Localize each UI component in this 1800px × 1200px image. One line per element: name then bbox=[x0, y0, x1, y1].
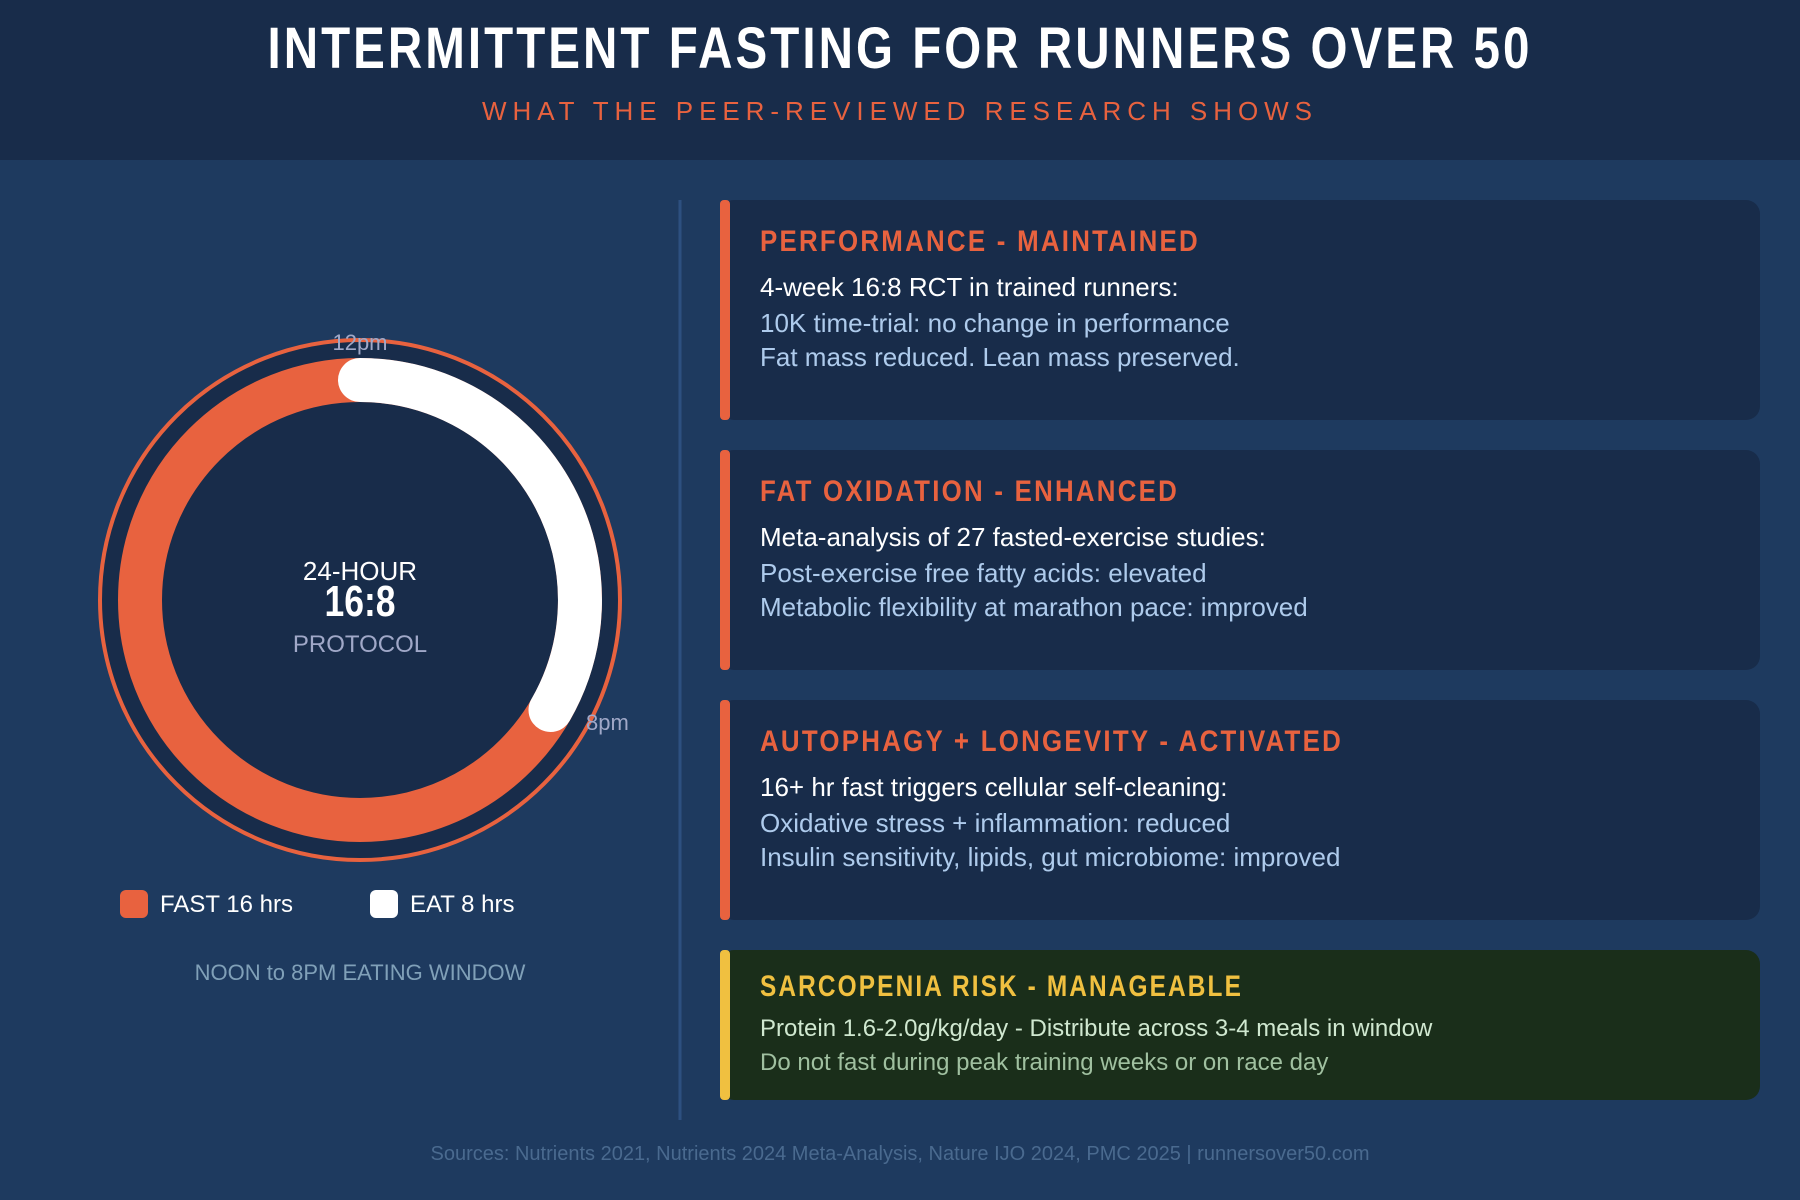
center label: PROTOCOL bbox=[293, 631, 427, 658]
text block bbox=[760, 522, 1308, 622]
panel: fat oxidation bbox=[720, 450, 1760, 670]
text block: Post-exercise free fatty acids: elevated bbox=[760, 558, 1207, 588]
panel: performance bbox=[720, 200, 1760, 420]
text block: Fat mass reduced. Lean mass preserved. bbox=[760, 342, 1240, 372]
heading: PERFORMANCE - MAINTAINED bbox=[760, 225, 1200, 258]
header band bbox=[0, 0, 1800, 160]
title: INTERMITTENT FASTING FOR RUNNERS OVER 50 bbox=[268, 16, 1532, 81]
panel: 24-hour clock bbox=[100, 330, 629, 985]
panel: autophagy bbox=[720, 700, 1760, 920]
text block: 4-week 16:8 RCT in trained runners: bbox=[760, 272, 1179, 302]
text block bbox=[760, 272, 1240, 372]
heading: AUTOPHAGY + LONGEVITY - ACTIVATED bbox=[760, 725, 1343, 758]
text block: Metabolic flexibility at marathon pace: improved bbox=[760, 592, 1308, 622]
text block: Do not fast during peak training weeks or on race day bbox=[760, 1049, 1328, 1076]
text block: 16+ hr fast triggers cellular self-cleaning: bbox=[760, 772, 1228, 802]
text block: Insulin sensitivity, lipids, gut microbiome: improved bbox=[760, 842, 1340, 872]
center label: 24-HOUR bbox=[303, 556, 417, 586]
subtitle: WHAT THE PEER-REVIEWED RESEARCH SHOWS bbox=[482, 96, 1318, 126]
center label bbox=[293, 556, 427, 658]
text block: Oxidative stress + inflammation: reduced bbox=[760, 808, 1230, 838]
panel: sarcopenia risk bbox=[720, 950, 1760, 1100]
text block: Meta-analysis of 27 fasted-exercise studies: bbox=[760, 522, 1266, 552]
text block bbox=[760, 1015, 1433, 1076]
legend: EAT 8 hrs bbox=[410, 891, 514, 918]
donut chart: 16:8 protocol bbox=[100, 340, 620, 860]
heading: SARCOPENIA RISK - MANAGEABLE bbox=[760, 970, 1243, 1003]
center label: 16:8 bbox=[324, 577, 396, 626]
text block: 10K time-trial: no change in performance bbox=[760, 308, 1230, 338]
legend: FAST 16 hrs bbox=[160, 891, 293, 918]
text block bbox=[760, 772, 1340, 872]
label: 12pm: 12pm bbox=[332, 330, 388, 355]
text block: Protein 1.6-2.0g/kg/day - Distribute across 3-4 meals in window bbox=[760, 1015, 1433, 1042]
eating window caption: NOON to 8PM EATING WINDOW bbox=[195, 960, 526, 985]
sources footer: Sources: Nutrients 2021, Nutrients 2024 Meta-Analysis, Nature IJO 2024, PMC 2025 | runnersover50.com bbox=[431, 1143, 1369, 1165]
label: 8pm: 8pm bbox=[586, 710, 629, 735]
legend bbox=[120, 890, 514, 918]
heading: FAT OXIDATION - ENHANCED bbox=[760, 475, 1179, 508]
